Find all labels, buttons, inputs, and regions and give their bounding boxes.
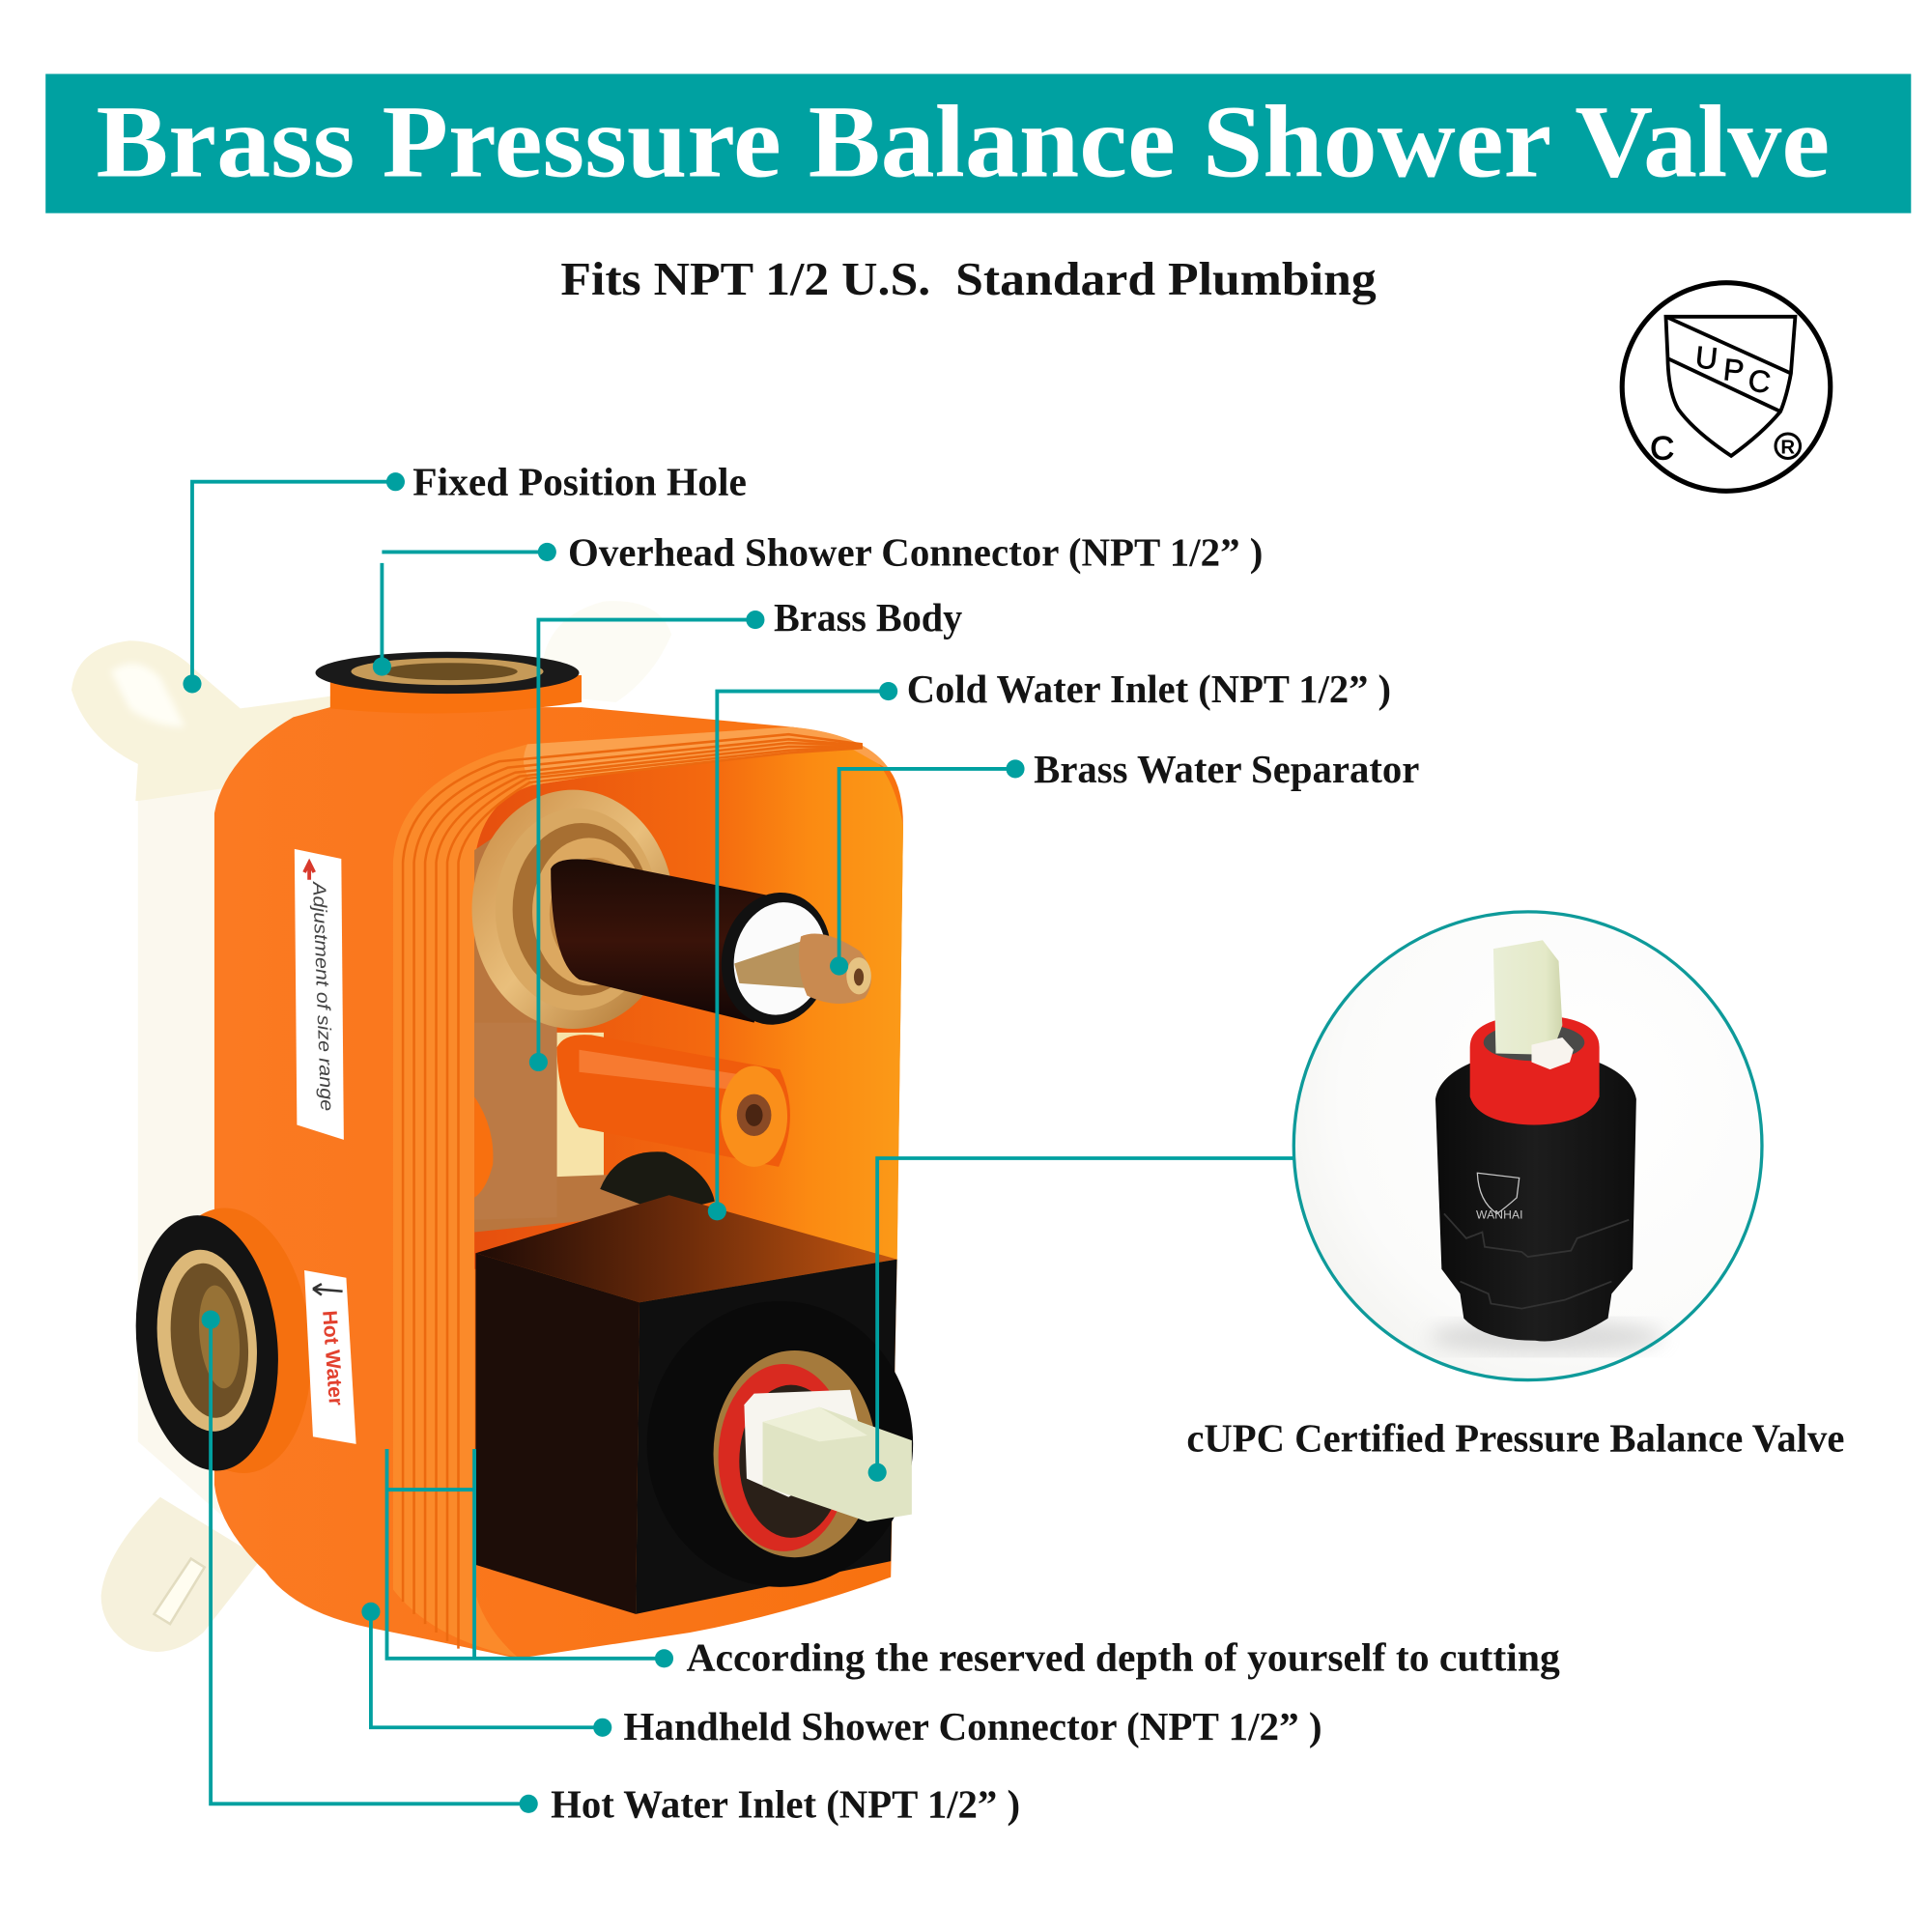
black block with cartridge (475, 1195, 913, 1614)
cartridge logo (1476, 1173, 1523, 1221)
callout: cold water inlet: Cold Water Inlet (NPT 1/2” ) (907, 668, 1391, 711)
callout: handheld shower connector: Handheld Shower Connector (NPT 1/2” ) (623, 1705, 1322, 1748)
interior back wall (474, 747, 903, 1269)
callout: hot water inlet: Hot Water Inlet (NPT 1/2” ) (551, 1782, 1020, 1826)
orange rod with screw hole (557, 1035, 790, 1213)
black cylinder and brass stem (551, 859, 871, 1035)
callout: brass water separator: Brass Water Separator (1034, 748, 1419, 791)
sticker: hot water (304, 1270, 356, 1444)
callout: fixed position hole: Fixed Position Hole (412, 461, 747, 504)
brass body casting (472, 790, 674, 1233)
title banner: Brass Pressure Balance Shower Valve (96, 85, 1830, 199)
callout: overhead shower connector: Overhead Shower Connector (NPT 1/2” ) (568, 530, 1263, 574)
callout: cold water inlet (708, 668, 1391, 1220)
icon: cUPC certification badge: P (1721, 352, 1746, 388)
callout: reserved depth bracket (387, 1449, 1560, 1680)
callout: handheld shower connector (361, 1603, 1322, 1748)
callout: brass body: Brass Body (774, 596, 962, 639)
mounting lugs and back plate (71, 601, 671, 1652)
orange housing (214, 707, 903, 1659)
callout: fixed position hole (183, 461, 747, 693)
icon: cUPC certification badge: U (1693, 339, 1719, 376)
left hot water port (124, 1200, 324, 1481)
icon: cUPC certification badge: R (1780, 437, 1795, 458)
cartridge photo circle (1293, 912, 1762, 1380)
sticker: hot water: Hot Water (318, 1310, 347, 1406)
ribbed front frame (393, 727, 890, 1658)
cartridge black body (1435, 1047, 1636, 1342)
sticker: adjustment range (295, 849, 344, 1140)
icon: cUPC certification badge: C (1746, 362, 1773, 400)
callout line: pressure balance valve (868, 1158, 1293, 1482)
cartridge red collar (1470, 1015, 1600, 1125)
icon: cUPC certification badge (1622, 283, 1831, 491)
subtitle: Fits NPT 1/2 U.S. Standard Plumbing (560, 254, 1377, 305)
callout: brass body (529, 596, 962, 1071)
valve product illustration (71, 601, 913, 1659)
top port (316, 652, 582, 714)
icon: cUPC certification badge: C (1650, 431, 1674, 468)
sticker: adjustment range: Adjustment of size range (308, 881, 336, 1112)
cartridge caption: cUPC Certified Pressure Balance Valve (1186, 1417, 1844, 1461)
cartridge cream stem (1493, 940, 1562, 1055)
callout: overhead shower connector (373, 530, 1263, 676)
cartridge logo: WANHAI (1476, 1208, 1523, 1221)
callout: hot water inlet (202, 1311, 1020, 1826)
callout: reserved depth bracket: According the reserved depth of yourself to cutting (686, 1636, 1560, 1680)
callout: brass water separator (830, 748, 1419, 976)
